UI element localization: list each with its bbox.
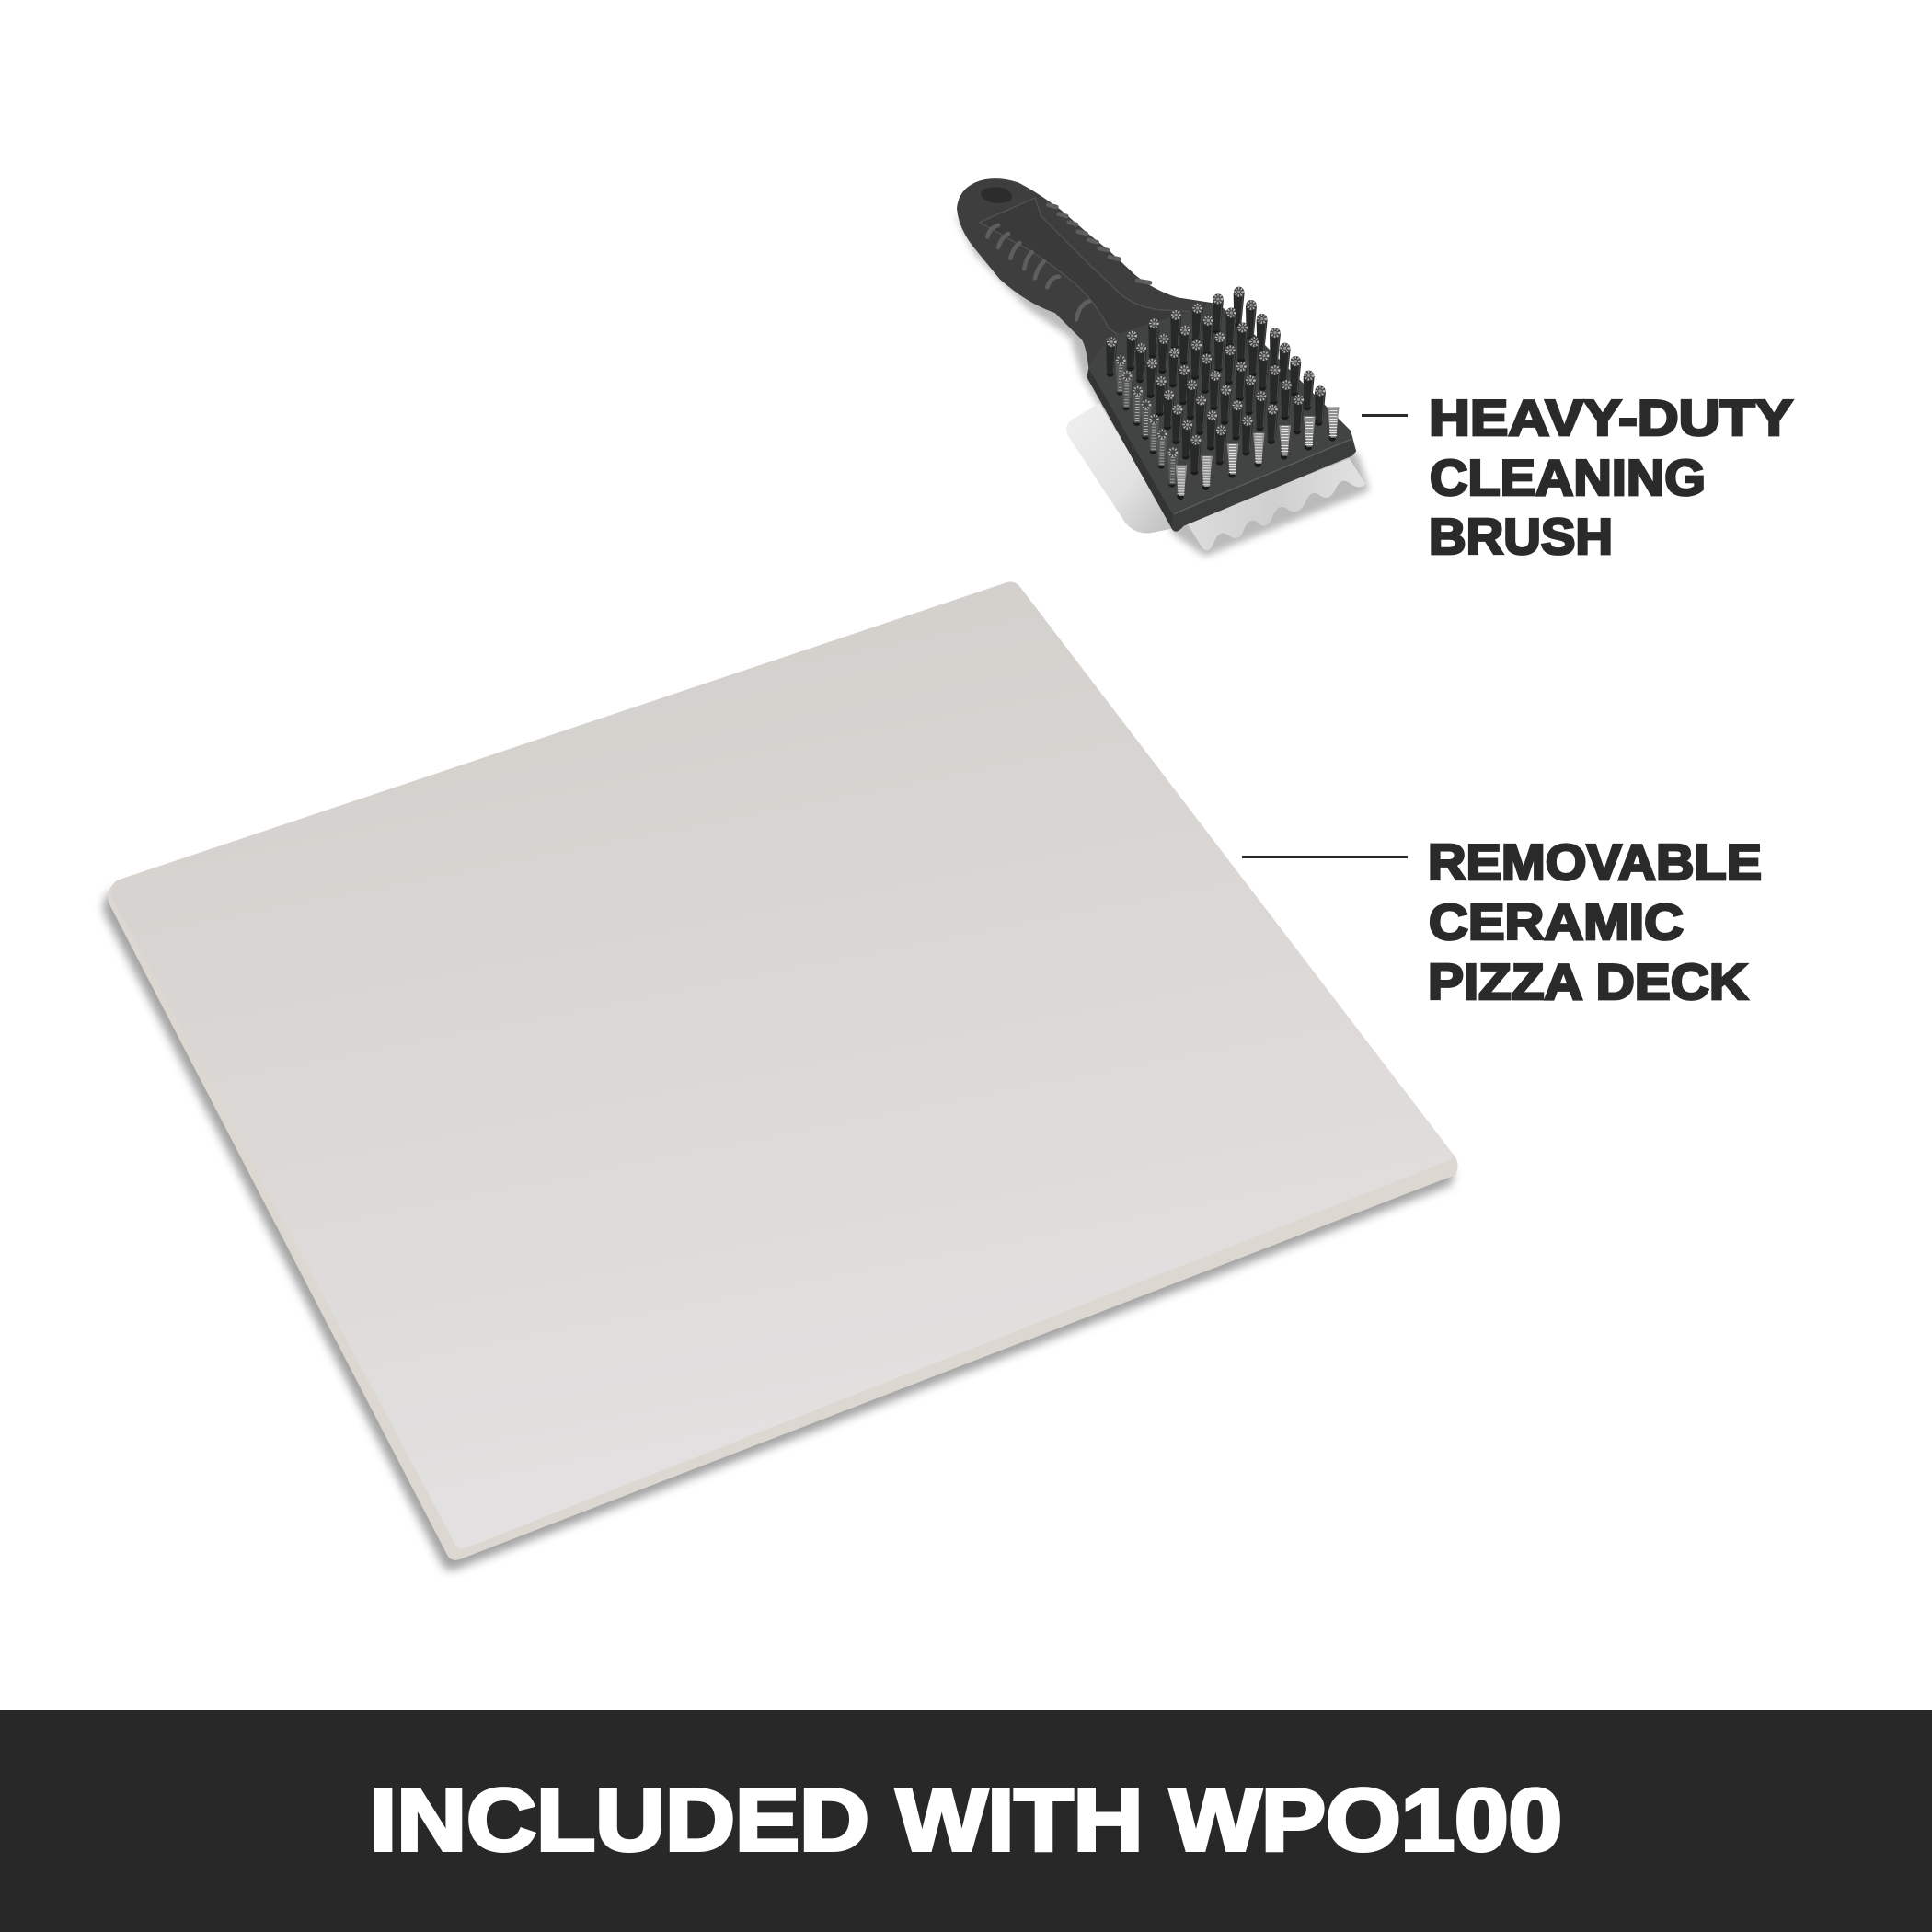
handle hole — [981, 187, 1012, 203]
scraper blade: toothed — [1187, 458, 1365, 550]
footer title: INCLUDED WITH WPO100 — [370, 1771, 1562, 1869]
scraper blade: side — [1066, 403, 1175, 533]
ceramic pizza deck — [103, 581, 1457, 1570]
callout: removable ceramic pizza deck: CERAMIC — [1429, 893, 1684, 950]
callout: removable ceramic pizza deck: REMOVABLE — [1428, 834, 1762, 891]
callout: heavy-duty cleaning brush: HEAVY-DUTY — [1429, 389, 1793, 446]
bristle tufts — [1106, 287, 1340, 500]
callout: removable ceramic pizza deck: PIZZA DECK — [1428, 953, 1748, 1010]
callout: heavy-duty cleaning brush: CLEANING — [1430, 449, 1706, 506]
footer band — [0, 1710, 1932, 1932]
brush head — [1088, 304, 1356, 532]
cleaning brush — [955, 178, 1369, 557]
leader line: brush — [1362, 414, 1408, 417]
callout: removable ceramic pizza deck — [1428, 834, 1762, 1010]
brush handle — [957, 178, 1356, 453]
callout: heavy-duty cleaning brush: BRUSH — [1429, 508, 1613, 565]
brush shadow — [955, 214, 1369, 557]
handle recess — [980, 198, 1208, 338]
leader line: deck — [1242, 856, 1408, 858]
callout: heavy-duty cleaning brush — [1429, 389, 1793, 565]
handle ribs — [987, 205, 1150, 319]
